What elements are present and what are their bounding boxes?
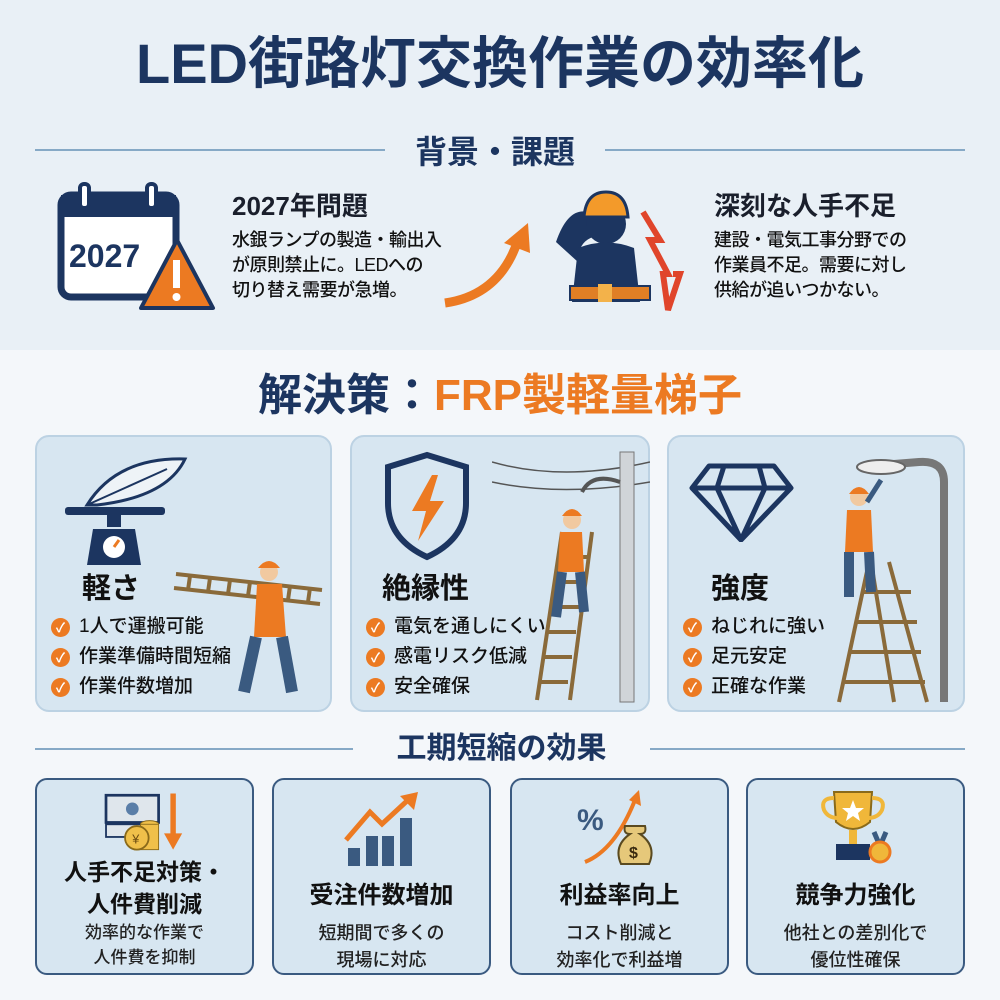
icon: bar chart up	[344, 792, 418, 866]
card: profit margin	[510, 778, 729, 975]
panel: strength: 強度	[711, 573, 769, 605]
panel: lightness: 軽さ	[82, 573, 140, 605]
list: lightness	[51, 616, 231, 697]
text: 2027 problem: が原則禁止に。LEDへの	[232, 255, 423, 275]
section header: effects: 工期短縮の効果	[396, 732, 606, 765]
panel: lightness	[35, 435, 332, 712]
illustration: worker on stepladder with streetlight	[837, 458, 948, 702]
illustration: worker on ladder at pole	[492, 452, 650, 702]
list: strength: 足元安定	[711, 646, 787, 667]
card: competitiveness	[746, 778, 965, 975]
list: lightness: ✓	[56, 680, 65, 694]
card: labor cost: 人件費削減	[87, 891, 202, 917]
list: insulation: 感電リスク低減	[394, 646, 527, 667]
card: orders increase: 受注件数増加	[310, 882, 454, 909]
panel: insulation: 絶縁性	[382, 573, 469, 605]
list: lightness: 作業件数増加	[79, 676, 193, 697]
card: competitiveness: 優位性確保	[810, 950, 900, 970]
icon: money down	[104, 794, 182, 850]
icon: calendar 2027	[58, 182, 216, 310]
text: labor shortage: 建設・電気工事分野での	[714, 230, 906, 250]
text: 2027 problem: 水銀ランプの製造・輸出入	[232, 230, 441, 250]
text: labor shortage: 深刻な人手不足	[714, 191, 896, 221]
icon: money down: ¥	[131, 832, 140, 846]
icon: percent money bag: $	[628, 845, 638, 862]
list: strength: ねじれに強い	[711, 616, 825, 637]
list: insulation: ✓	[371, 620, 380, 634]
list: insulation: 安全確保	[394, 676, 470, 697]
icon: diamond	[689, 464, 794, 542]
list: lightness: ✓	[56, 620, 65, 634]
list: strength: ✓	[688, 680, 697, 694]
list: strength: ✓	[688, 620, 697, 634]
card: profit margin: 効率化で利益増	[556, 950, 682, 970]
title: LED街路灯交換作業の効率化	[136, 32, 864, 95]
arrow: orange rising	[444, 223, 530, 308]
card: competitiveness: 他社との差別化で	[784, 923, 927, 943]
list: insulation: 電気を通しにくい	[394, 616, 546, 637]
card: profit margin: 利益率向上	[560, 882, 680, 909]
panel: insulation	[350, 435, 650, 712]
icon: percent money bag	[576, 790, 653, 865]
illustration: worker carrying ladder	[174, 561, 322, 694]
card: competitiveness: 競争力強化	[796, 882, 916, 909]
list: strength: 正確な作業	[711, 676, 806, 697]
list: lightness: ✓	[56, 650, 65, 664]
icon: trophy medal	[821, 791, 892, 864]
icon: calendar 2027: 2027	[69, 238, 140, 274]
list: insulation	[366, 616, 546, 697]
panel: strength	[667, 435, 965, 712]
text: 2027 problem: 2027年問題	[232, 191, 368, 221]
text: 2027 problem	[232, 191, 442, 300]
list: insulation: ✓	[371, 680, 380, 694]
list: strength	[683, 616, 825, 697]
text: labor shortage: 作業員不足。需要に対し	[714, 255, 906, 275]
card: labor cost: 人件費を抑制	[94, 948, 196, 967]
card: labor cost: 人手不足対策・	[64, 859, 225, 885]
solution heading: 解決策：FRP製軽量梯子	[258, 371, 742, 420]
icon: percent money bag: %	[576, 804, 603, 837]
icon: worker worried	[556, 190, 684, 311]
card: orders increase: 現場に対応	[336, 950, 426, 970]
text: labor shortage: 供給が追いつかない。	[714, 280, 889, 300]
text: 2027 problem: 切り替え需要が急増。	[232, 280, 407, 300]
list: insulation: ✓	[371, 650, 380, 664]
card: labor cost: 効率的な作業で	[85, 923, 204, 942]
card: profit margin: コスト削減と	[566, 923, 674, 943]
section header: background: 背景・課題	[415, 134, 575, 170]
icon: shield lightning	[385, 452, 469, 560]
text: labor shortage	[714, 191, 906, 300]
icon: feather on scale	[65, 457, 188, 565]
card: orders increase: 短期間で多くの	[318, 923, 444, 943]
list: strength: ✓	[688, 650, 697, 664]
list: lightness: 作業準備時間短縮	[79, 646, 231, 667]
list: lightness: 1人で運搬可能	[79, 616, 204, 637]
card: labor cost	[35, 778, 254, 975]
card: orders increase	[272, 778, 491, 975]
